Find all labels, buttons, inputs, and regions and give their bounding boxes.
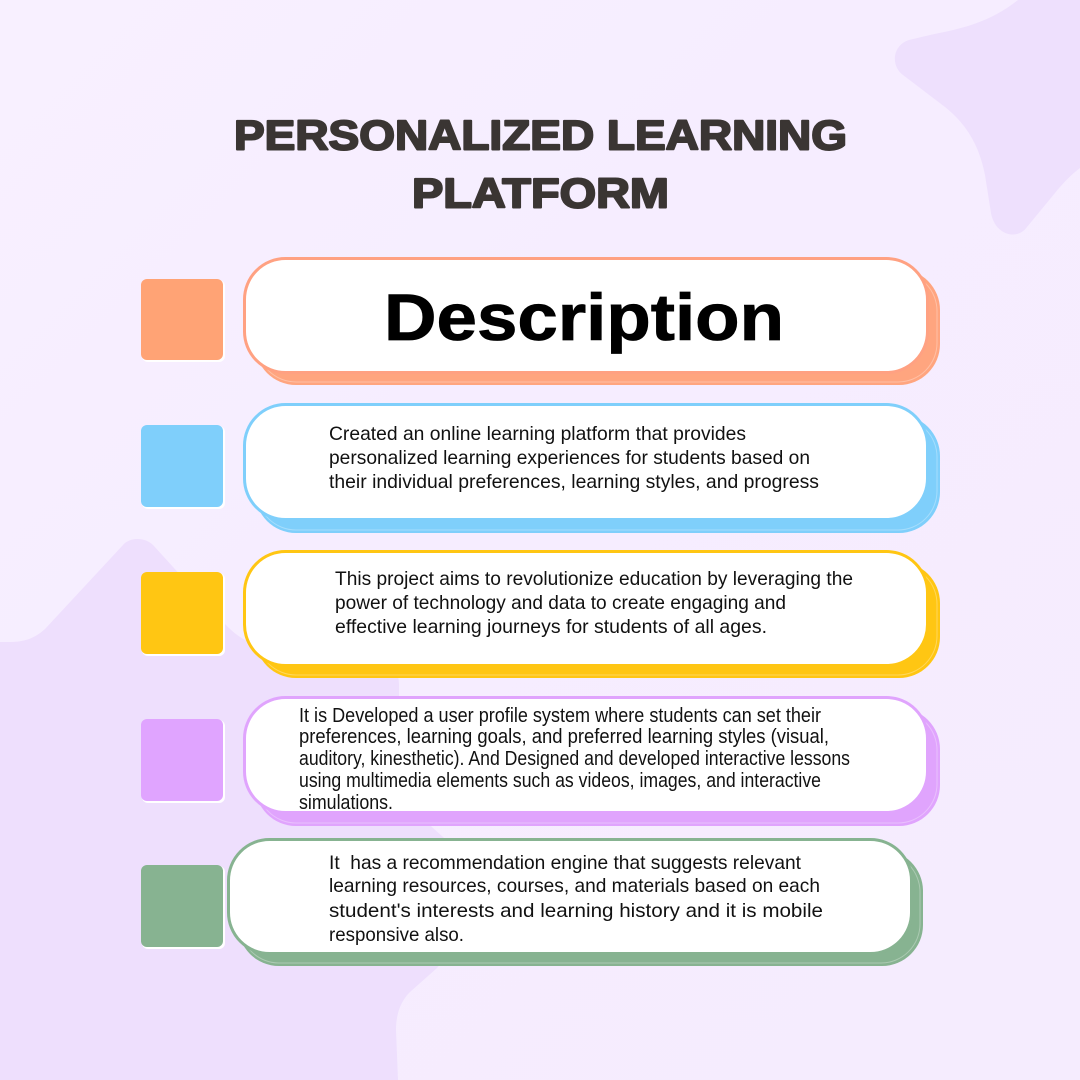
text: recommendation engine: It has a recommendation engine that suggests relevant: [329, 852, 802, 874]
icon square: green: [141, 865, 225, 949]
background blob: top right: [895, 0, 1080, 235]
text: project aim: [335, 568, 853, 638]
text: user profiles and lessons: simulations.: [299, 792, 393, 814]
title: PLATFORM: [412, 170, 669, 216]
text: platform overview: personalized learning experiences for students based on: [329, 447, 810, 469]
panel: platform overview: [244, 404, 940, 533]
text: user profiles and lessons: [299, 705, 850, 814]
text: project aim: power of technology and data to create engaging and: [335, 592, 786, 614]
title: [234, 112, 847, 216]
heading: Description: Description: [384, 280, 784, 354]
panel: project aim: [244, 552, 940, 678]
icon square: purple: [141, 719, 225, 803]
background blob: bottom left: [0, 539, 500, 1080]
text: user profiles and lessons: preferences, learning goals, and preferred learning styles (visual,: [299, 726, 829, 748]
title: PERSONALIZED LEARNING: [234, 112, 847, 158]
text: recommendation engine: learning resources, courses, and materials based on each: [329, 875, 820, 897]
text: platform overview: [329, 423, 819, 493]
panel: recommendation engine: [228, 840, 923, 966]
text: platform overview: their individual preferences, learning styles, and progress: [329, 471, 819, 493]
text: recommendation engine: [329, 852, 823, 946]
icon square: yellow: [141, 572, 225, 656]
text: platform overview: Created an online learning platform that provides: [329, 423, 746, 445]
text: user profiles and lessons: using multimedia elements such as videos, images, and interactive: [299, 770, 821, 792]
panel: description heading: [244, 258, 940, 385]
panel: user profiles and lessons: [244, 698, 940, 826]
text: project aim: This project aims to revolutionize education by leveraging the: [335, 568, 853, 590]
text: recommendation engine: student's interests and learning history and it is mobile: [329, 900, 823, 922]
icon square: orange: [141, 279, 225, 362]
text: recommendation engine: responsive also.: [329, 924, 464, 946]
icon square: blue: [141, 425, 225, 509]
text: project aim: effective learning journeys for students of all ages.: [335, 616, 767, 638]
text: user profiles and lessons: It is Developed a user profile system where students can set their: [299, 705, 821, 727]
text: user profiles and lessons: auditory, kinesthetic). And Designed and developed interactive lessons: [299, 748, 850, 770]
